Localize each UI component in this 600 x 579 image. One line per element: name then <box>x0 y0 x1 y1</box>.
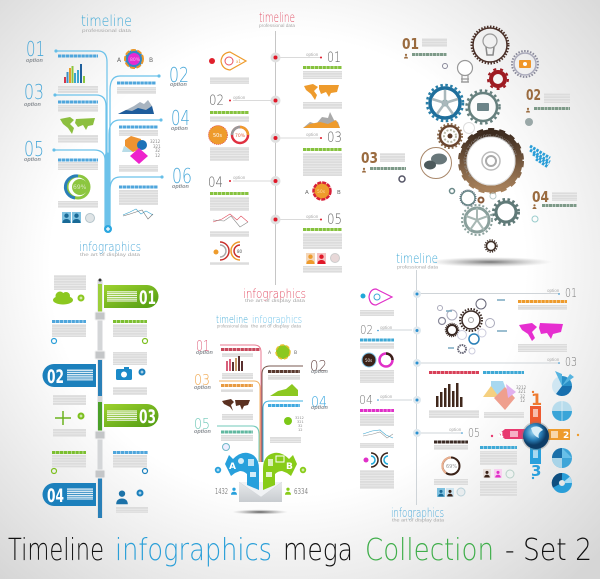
gear: large brown with circular text <box>458 128 524 194</box>
numbered labels: 05 <box>24 137 44 161</box>
numbered labels: option <box>311 405 328 411</box>
title: infographics <box>115 533 272 568</box>
numbered labels: option <box>311 369 328 375</box>
headings: professional data <box>217 324 248 328</box>
icon: location drop: x1 <box>236 59 241 64</box>
headings: the art of display data <box>251 324 302 328</box>
tab 04: 04 <box>47 485 64 507</box>
world map <box>222 399 250 411</box>
gear: camera grey <box>466 90 500 124</box>
footer: infographics: infographics <box>79 240 141 254</box>
shapes chart: 32 <box>520 394 526 399</box>
numbered labels: 02 <box>310 357 327 375</box>
gear cluster <box>438 299 507 354</box>
numbered labels: option <box>26 58 43 64</box>
globe cross diagram: 2 <box>563 431 569 441</box>
timeline nodes <box>377 290 560 437</box>
green dot with numbers: 12 <box>298 428 302 432</box>
numbered labels: option <box>380 394 393 399</box>
numbered labels: option <box>306 132 319 137</box>
text blocks <box>221 350 301 443</box>
world map <box>60 117 95 134</box>
counters <box>215 487 308 496</box>
green dot with numbers <box>284 416 304 432</box>
shapes chart: 12 <box>520 398 526 403</box>
numbered labels: option <box>233 175 246 180</box>
icon: person <box>116 490 128 504</box>
world map <box>519 323 563 341</box>
numbered labels: 01 <box>565 286 577 300</box>
numbered labels: 05 <box>194 415 210 433</box>
gear: large brown with circular text: IS THE KEY OF TECHNOLOGY · EVOLUTION OF <box>464 134 517 178</box>
arrow A blue: A <box>229 462 236 472</box>
heading: timeline: professional data <box>259 23 296 28</box>
donut chart <box>442 457 460 474</box>
heading: timeline: timeline <box>81 12 132 30</box>
ground shadow <box>428 257 552 267</box>
arrow B green <box>263 453 297 490</box>
numbered labels <box>208 50 342 228</box>
footer: infographics: the art of display data <box>245 298 306 303</box>
progress circles <box>362 353 392 367</box>
title: mega <box>283 533 353 568</box>
shapes chart: 321 <box>153 144 161 149</box>
numbered labels: option <box>306 214 319 219</box>
numbered labels with brief text: 04 <box>532 188 549 206</box>
heading: timeline: timeline <box>259 11 295 26</box>
badge A B: A <box>305 190 309 196</box>
badge <box>268 345 297 359</box>
headings <box>216 313 302 328</box>
gears: grey lower pair <box>462 200 518 235</box>
numbered labels with brief text <box>361 35 577 222</box>
green dot with numbers: 3212 <box>295 416 304 420</box>
central spine and connectors <box>233 31 321 285</box>
shapes chart <box>483 381 527 410</box>
title: Collection <box>365 533 494 568</box>
gear: small brown <box>438 124 462 148</box>
arrow B green: B <box>286 462 293 472</box>
badge A B: 50s <box>317 189 326 195</box>
tab 01: 01 <box>139 287 156 309</box>
badge A B: B <box>149 57 153 64</box>
title <box>8 533 592 568</box>
badge A B <box>117 50 153 68</box>
badge A B: B <box>337 190 341 196</box>
donut chart 69% <box>65 176 89 198</box>
footer: infographics: infographics <box>391 506 444 520</box>
spine and connectors <box>380 270 560 505</box>
icon: plus end cap <box>104 225 112 233</box>
panel: blue timeline <box>24 12 192 257</box>
panel: red timeline <box>208 11 342 303</box>
text blocks <box>52 275 148 513</box>
slider handles <box>95 312 105 478</box>
tab 03 <box>104 404 158 428</box>
donut chart: 69% <box>446 464 457 470</box>
numbered labels: 03 <box>327 130 342 146</box>
numbered labels: 05 <box>327 212 342 228</box>
footer: infographics: infographics <box>243 287 306 301</box>
footer: infographics <box>391 506 445 522</box>
numbered labels: option <box>24 157 41 163</box>
text blocks <box>210 68 342 273</box>
numbered labels <box>194 337 328 435</box>
title: Timeline <box>8 533 104 568</box>
gear: light bulb <box>472 26 508 64</box>
numbered labels: option <box>196 350 213 356</box>
green dot with numbers: 32 <box>298 424 302 428</box>
shapes chart: 32 <box>155 148 161 153</box>
counters: 1432 <box>215 487 228 496</box>
numbered labels: 03 <box>565 355 577 369</box>
blue diamond cluster <box>530 146 550 167</box>
icon: camera <box>116 367 132 380</box>
text blocks <box>360 302 567 496</box>
icon: cloud <box>53 292 73 304</box>
line chart <box>123 209 153 219</box>
numbered labels with brief text: 01 <box>402 35 419 53</box>
numbered labels: option <box>194 385 211 391</box>
numbered labels: 04 <box>171 106 190 130</box>
avatars <box>437 469 514 497</box>
gear: camera orange <box>512 51 538 77</box>
numbered labels: option <box>172 184 189 190</box>
gear: red <box>488 69 508 89</box>
badge A B: A <box>117 57 122 64</box>
pie charts <box>552 371 574 490</box>
timeline nodes <box>229 52 322 224</box>
progress circles <box>208 126 248 144</box>
panel: vertical tabs timeline <box>43 275 159 518</box>
area chart <box>118 100 154 114</box>
icon: speech bubbles <box>420 148 452 178</box>
small badge <box>222 444 230 450</box>
numbered labels: 02 <box>209 93 224 109</box>
badge A B <box>305 182 341 200</box>
numbered labels: option <box>547 357 560 362</box>
numbered labels: option <box>547 288 560 293</box>
gear: blue wheel <box>427 85 463 121</box>
bar chart <box>226 356 243 371</box>
numbered labels: option <box>170 82 187 88</box>
numbered labels with brief text: 02 <box>526 86 541 104</box>
numbered labels with brief text: 03 <box>361 149 378 167</box>
footer: infographics: the art of display data <box>80 252 141 257</box>
numbered labels: option <box>194 429 211 435</box>
icon: location drop <box>209 52 246 70</box>
panel: multi-color timeline <box>359 270 579 522</box>
numbered labels: 03 <box>194 371 210 389</box>
footer: infographics: the art of display data <box>392 518 445 522</box>
globe cross diagram: 3 <box>531 462 541 480</box>
branches <box>217 345 303 462</box>
counters: 6334 <box>294 487 308 496</box>
globe cross diagram: 4 <box>498 431 504 440</box>
shapes chart: 321 <box>518 389 526 394</box>
plus dots <box>215 467 306 473</box>
numbered labels: 04 <box>311 393 327 411</box>
icon: location drop <box>360 289 392 305</box>
line chart <box>213 214 248 227</box>
tab 04 <box>43 483 96 507</box>
numbered labels: option <box>449 427 462 432</box>
panel: arrow envelope timeline <box>194 313 328 514</box>
numbered labels: 01 <box>26 37 45 61</box>
bar chart <box>64 64 85 83</box>
badge A B: 80% <box>130 57 141 63</box>
globe cross diagram: 1 <box>531 390 542 409</box>
ring <box>464 122 474 134</box>
numbered labels: 01 <box>327 50 341 66</box>
numbered labels: 01 <box>196 337 210 355</box>
numbered labels <box>24 37 192 190</box>
avatars <box>62 212 94 223</box>
numbered labels: 03 <box>24 80 44 104</box>
concentric pie icons: 80 <box>237 249 243 254</box>
heading: timeline <box>259 11 296 28</box>
gear: small dark <box>485 240 497 252</box>
tab 02: 02 <box>47 366 64 388</box>
numbered labels: 06 <box>172 164 192 188</box>
numbered labels <box>359 286 577 440</box>
avatars <box>306 253 340 264</box>
badge: A <box>268 350 272 356</box>
tab 02 <box>43 364 96 388</box>
globe cross diagram <box>491 390 579 480</box>
panel: gears <box>361 26 577 270</box>
green dot with numbers: 321 <box>297 420 304 424</box>
small gears <box>450 188 496 206</box>
tab 01 <box>104 285 158 309</box>
central spine <box>98 278 102 518</box>
arrow A blue <box>225 453 259 490</box>
numbered labels: option <box>306 52 319 57</box>
heading: timeline: professional data <box>82 28 132 33</box>
numbered labels: option <box>171 126 188 132</box>
headings: infographics <box>252 313 302 326</box>
progress circles: 70% <box>235 133 246 139</box>
plus dots <box>52 294 148 496</box>
shapes chart <box>122 136 161 164</box>
numbered labels: option <box>233 95 246 100</box>
concentric pie icons <box>364 453 388 467</box>
tab 03: 03 <box>139 406 156 428</box>
headings: timeline <box>216 313 248 326</box>
ground shadow <box>232 510 288 514</box>
donut chart 69%: 69% <box>73 184 87 191</box>
concentric pie icons <box>214 242 243 260</box>
area chart <box>270 384 298 396</box>
shapes chart: 3212 <box>516 385 527 390</box>
line chart <box>363 430 393 438</box>
progress circles: 50s <box>365 358 372 363</box>
bar chart <box>436 383 462 407</box>
icon: outline light bulb <box>458 60 472 82</box>
icon: green cross <box>55 411 71 425</box>
heading: timeline: timeline <box>396 252 438 267</box>
badge: B <box>294 350 297 356</box>
progress circles: 50s <box>213 133 222 139</box>
shapes chart: 12 <box>155 153 161 158</box>
numbered labels: option <box>24 102 41 108</box>
timeline branches <box>53 50 163 228</box>
numbered labels: 04 <box>359 393 373 407</box>
numbered labels: 02 <box>360 323 373 337</box>
heading: timeline: professional data <box>397 264 439 270</box>
area chart <box>303 112 340 128</box>
numbered labels: 05 <box>468 426 480 440</box>
world map <box>304 84 339 100</box>
numbered labels: option <box>380 325 393 330</box>
shapes chart: 3212 <box>150 139 161 144</box>
text blocks <box>58 56 158 208</box>
numbered labels: 02 <box>169 63 189 87</box>
numbered labels: 04 <box>208 175 223 191</box>
envelope <box>239 482 282 502</box>
